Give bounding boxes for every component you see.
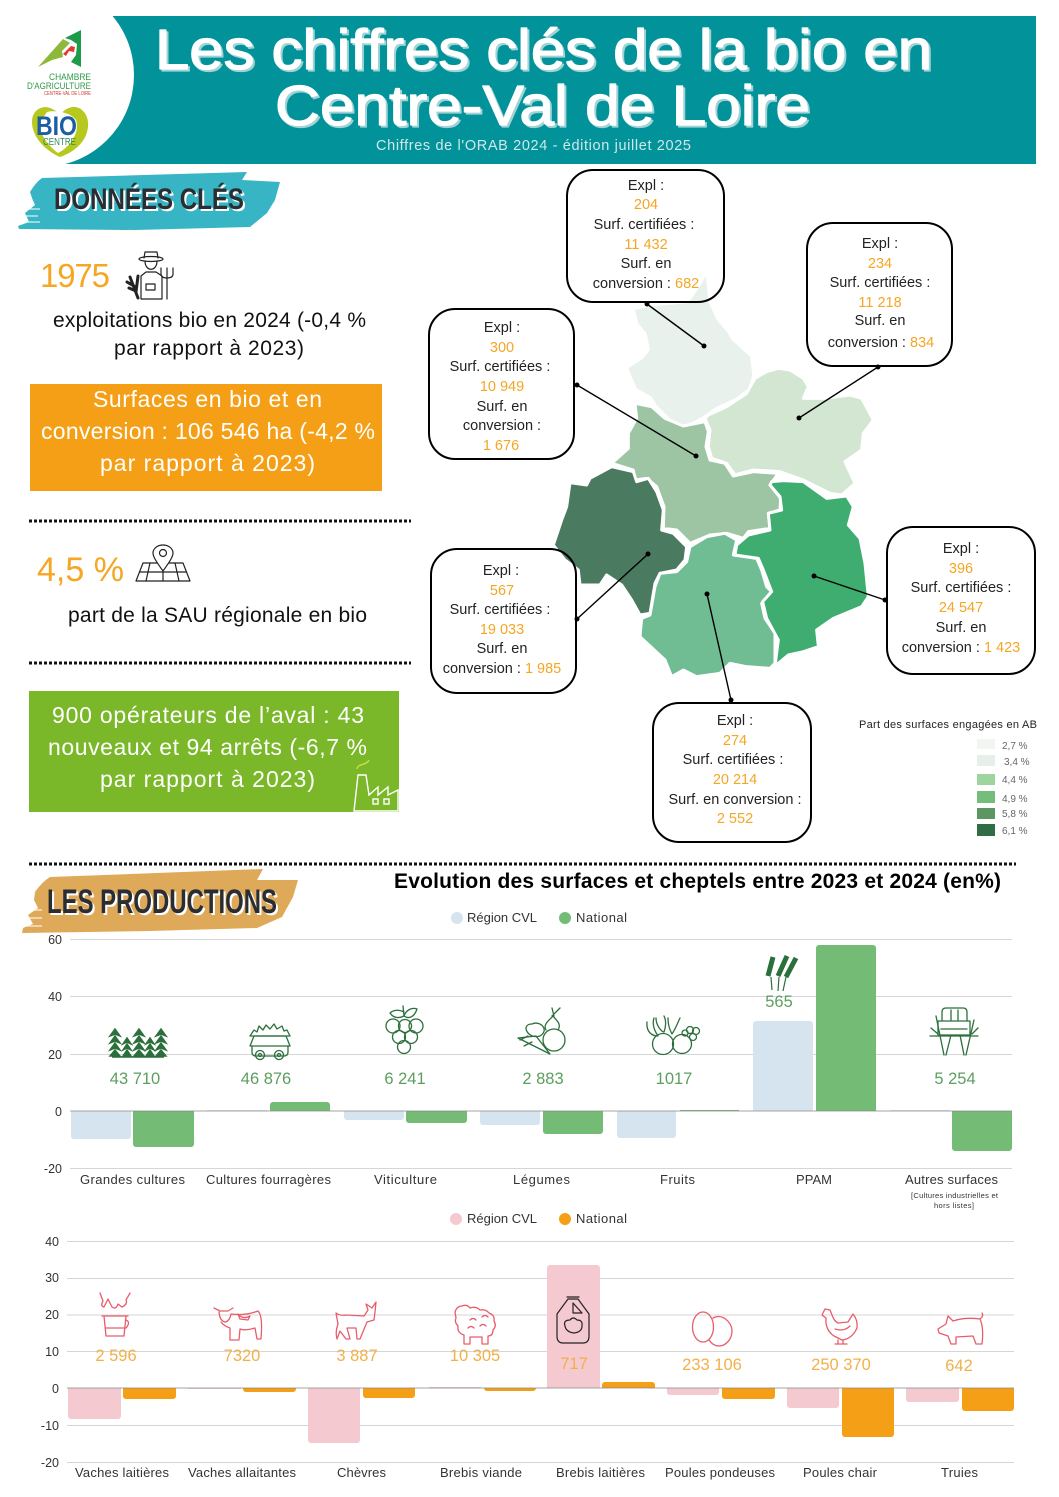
categories: surfaces: hors listes] (934, 1201, 974, 1210)
title (155, 18, 934, 140)
values: surfaces: 5 254 (934, 1070, 976, 1088)
bars: cheptels (67, 1265, 1014, 1443)
map legend: Part des surfaces engagées en AB (859, 719, 1037, 731)
icon: poule (822, 1309, 857, 1344)
callout: Eure-et-Loir (567, 170, 724, 348)
title: Les chiffres clés de la bio en (155, 18, 932, 82)
categories: surfaces: Cultures fourragères (206, 1172, 332, 1187)
panel: opérateurs de l'aval: 900 opérateurs de l’aval : 43 (52, 702, 364, 728)
panel: opérateurs de l'aval: par rapport à 2023) (100, 766, 315, 792)
region: Eure-et-Loir (628, 276, 752, 425)
y axis: surfaces: 20 (48, 1048, 62, 1062)
map legend: 5,8 % (1002, 809, 1028, 820)
icon: légumes (518, 1008, 565, 1054)
stat: 4,5 %: 4,5 % (37, 551, 124, 589)
icon: seau de lait (100, 1293, 130, 1336)
title: Centre-Val de Loire (277, 76, 812, 140)
logo: bio centre: CENTRE (43, 137, 76, 148)
icon: raisin (386, 1006, 423, 1054)
categories: surfaces: Viticulture (374, 1172, 437, 1187)
callout: Loiret: 11 218 (858, 295, 902, 311)
callout: Loiret: Expl : (862, 236, 898, 252)
y axis: surfaces (44, 933, 62, 1176)
logo: bio centre: BIO (36, 111, 77, 141)
callout: Loir-et-Cher: 10 949 (480, 379, 524, 395)
callout: Indre-et-Loire: Surf. certifiées : (450, 602, 550, 618)
legend: surfaces: National (576, 910, 627, 925)
categories: cheptels (75, 1465, 978, 1480)
map legend: 6,1 % (1002, 826, 1028, 837)
text: exploitations (53, 309, 366, 360)
categories: cheptels: Vaches allaitantes (188, 1465, 296, 1480)
legend: surfaces (451, 910, 627, 925)
callout: Indre: Surf. en conversion : (668, 792, 802, 808)
values: surfaces: 2 883 (522, 1070, 564, 1088)
map legend: 2,7 % (1002, 741, 1028, 752)
values: cheptels: 10 305 (450, 1347, 500, 1365)
callout: Loir-et-Cher (429, 309, 698, 459)
callout: Loiret: Surf. en (855, 313, 905, 329)
icon: charrette de foin (250, 1024, 290, 1060)
text: exploitations: exploitations bio en 2024 (-0,4 % (53, 309, 366, 332)
region: Indre-et-Loire (553, 467, 687, 615)
logo: chambre d'agriculture: D'AGRICULTURE (27, 81, 91, 92)
categories: cheptels: Poules chair (803, 1465, 878, 1480)
values: cheptels: 250 370 (811, 1356, 871, 1374)
title: Centre-Val de Loire (275, 74, 810, 138)
callout: Cher: 396 (949, 561, 973, 577)
categories: surfaces: PPAM (796, 1172, 832, 1187)
map legend: 4,9 % (1002, 794, 1028, 805)
subtitle: Chiffres de l'ORAB 2024 - édition juillet 2025 (376, 138, 691, 154)
callout: Indre-et-Loire (431, 549, 650, 693)
icon: farmer (127, 252, 173, 299)
values: surfaces (110, 993, 976, 1088)
callout: Indre-et-Loire: 19 033 (480, 622, 524, 638)
y axis: cheptels (41, 1235, 59, 1470)
icon: vache (214, 1308, 262, 1340)
region: Indre (640, 533, 775, 677)
panel: surfaces: Surfaces en bio et en (93, 386, 322, 412)
chart: cheptels (41, 1211, 1014, 1480)
bars: surfaces (70, 945, 1012, 1151)
categories: cheptels: Truies (941, 1465, 978, 1480)
chart title: Evolution des surfaces et cheptels entre 2023 et 2024 (en%) (394, 870, 1001, 893)
values: surfaces: 43 710 (110, 1070, 160, 1088)
map: régions (553, 276, 873, 677)
callout: Indre-et-Loire: Surf. en (477, 641, 527, 657)
y axis: cheptels: -10 (41, 1419, 59, 1433)
icon: plante industrielle et tracteur (930, 1008, 978, 1055)
categories: surfaces: [Cultures industrielles et (911, 1191, 999, 1200)
heading: données clés: DONNÉES CLÉS (54, 182, 244, 216)
panel: opérateurs de l'aval: nouveaux et 94 arrêts (-6,7 % (48, 734, 367, 760)
icon: factory (354, 760, 398, 811)
callout: Eure-et-Loir: Surf. certifiées : (594, 217, 694, 233)
categories: surfaces (80, 1172, 999, 1210)
y axis: surfaces: 40 (48, 990, 62, 1004)
header banner (0, 0, 1059, 167)
callout: Indre: Surf. certifiées : (683, 752, 783, 768)
heading: données clés (18, 172, 280, 230)
categories: surfaces: Fruits (660, 1172, 696, 1187)
icon: chèvre (336, 1302, 376, 1339)
region: Loiret (705, 368, 873, 495)
values: cheptels: 717 (560, 1355, 588, 1373)
callout: Loiret: 234 (868, 256, 892, 272)
callout: Loir-et-Cher: 1 676 (483, 438, 519, 454)
callout: Loiret (796, 223, 952, 420)
map legend: 3,4 % (1004, 757, 1030, 768)
callout: Eure-et-Loir: conversion : 682 (593, 276, 699, 292)
values: surfaces: 46 876 (241, 1070, 291, 1088)
categories: cheptels: Vaches laitières (75, 1465, 170, 1480)
y axis: cheptels: 0 (52, 1382, 59, 1396)
y axis: surfaces: -20 (44, 1162, 62, 1176)
values: cheptels (95, 1347, 973, 1375)
callout: Loir-et-Cher: Surf. en (477, 399, 527, 415)
panel: surfaces (30, 384, 382, 491)
y axis: surfaces: 0 (55, 1105, 62, 1119)
title: Les chiffres clés de la bio en (157, 20, 934, 84)
callout: Cher: Surf. en (936, 620, 986, 636)
values: cheptels: 2 596 (95, 1347, 137, 1365)
categories: cheptels: Brebis viande (440, 1465, 522, 1480)
categories: cheptels: Brebis laitières (556, 1465, 646, 1480)
icon: cochon (938, 1313, 983, 1344)
callout: Indre: Expl : (717, 713, 753, 729)
categories: cheptels: Chèvres (337, 1465, 386, 1480)
callout: Loir-et-Cher: conversion : (463, 418, 541, 434)
y axis: cheptels: 10 (45, 1345, 59, 1359)
y axis: cheptels: 40 (45, 1235, 59, 1249)
callout: Cher: Surf. certifiées : (911, 580, 1011, 596)
values: cheptels: 233 106 (682, 1356, 742, 1374)
legend: cheptels: Région CVL (467, 1211, 537, 1226)
callout: Eure-et-Loir: Surf. en (621, 256, 671, 272)
callout: Cher: conversion : 1 423 (902, 640, 1020, 656)
logo: chambre d'agriculture: CHAMBRE (49, 72, 91, 83)
callout: Indre: 2 552 (717, 811, 753, 827)
categories: cheptels: Poules pondeuses (665, 1465, 776, 1480)
callout: Cher: Expl : (943, 541, 979, 557)
categories: surfaces: Autres surfaces (905, 1172, 998, 1187)
legend: cheptels: National (576, 1211, 627, 1226)
callout: Loir-et-Cher: 300 (490, 340, 514, 356)
icon: map pin (136, 545, 190, 581)
icon: céréales (110, 1029, 166, 1057)
panel: surfaces: conversion : 106 546 ha (-4,2 % (41, 418, 375, 444)
callout: Indre: 274 (723, 733, 747, 749)
logo: chambre d'agriculture (27, 30, 92, 97)
callout: Eure-et-Loir: 11 432 (624, 237, 668, 253)
map legend: 4,4 % (1002, 775, 1028, 786)
icon: fruits (647, 1016, 700, 1054)
values: cheptels: 642 (945, 1357, 973, 1375)
callout: Indre (653, 592, 811, 842)
icon: oeufs (692, 1312, 732, 1346)
callout: Eure-et-Loir: 204 (634, 197, 658, 213)
heading: les productions: LES PRODUCTIONS (47, 883, 277, 921)
heading: données clés: DONNÉES CLÉS (56, 184, 246, 218)
chart: surfaces (44, 910, 1012, 1210)
icon: bouteille de lait de brebis (557, 1297, 589, 1343)
categories: surfaces: Légumes (513, 1172, 570, 1187)
text: exploitations: par rapport à 2023) (114, 337, 304, 360)
callout: Indre-et-Loire: Expl : (483, 563, 519, 579)
y axis: cheptels: -20 (41, 1456, 59, 1470)
map legend (859, 719, 1037, 837)
stat: 1975 exploitations: 1975 (40, 257, 110, 294)
callout: Loir-et-Cher: Expl : (484, 320, 520, 336)
callout: Cher: 24 547 (939, 600, 983, 616)
legend: surfaces: Région CVL (467, 910, 537, 925)
callout: Loir-et-Cher: Surf. certifiées : (450, 359, 550, 375)
callout: Cher (812, 527, 1035, 674)
logo: bio centre (32, 107, 88, 157)
icon: lavande (768, 956, 796, 991)
values: cheptels: 7320 (224, 1347, 260, 1365)
heading: les productions: LES PRODUCTIONS (49, 885, 279, 923)
callout: Loiret: conversion : 834 (828, 335, 934, 351)
heading: les productions (22, 869, 298, 933)
callout: Loiret: Surf. certifiées : (830, 275, 930, 291)
values: surfaces: 1017 (656, 1070, 692, 1088)
text: part de la SAU: part de la SAU régionale en bio (68, 604, 367, 627)
y axis: cheptels: 30 (45, 1271, 59, 1285)
icon: brebis (455, 1305, 495, 1344)
panel: surfaces: par rapport à 2023) (100, 450, 315, 476)
values: surfaces: 6 241 (384, 1070, 426, 1088)
region: Cher (735, 481, 868, 666)
callout: Indre-et-Loire: conversion : 1 985 (443, 661, 561, 677)
values: surfaces: 565 (765, 993, 793, 1011)
y axis: surfaces: 60 (48, 933, 62, 947)
callout: Indre-et-Loire: 567 (490, 583, 514, 599)
values: cheptels: 3 887 (336, 1347, 378, 1365)
y axis: cheptels: 20 (45, 1308, 59, 1322)
panel: opérateurs de l'aval (29, 691, 399, 812)
region: Loir-et-Cher (612, 403, 781, 543)
callout: Indre: 20 214 (713, 772, 757, 788)
legend: cheptels (450, 1211, 627, 1226)
logo: chambre d'agriculture: CENTRE-VAL DE LOIRE (44, 91, 92, 97)
callout: Eure-et-Loir: Expl : (628, 178, 664, 194)
categories: surfaces: Grandes cultures (80, 1172, 186, 1187)
